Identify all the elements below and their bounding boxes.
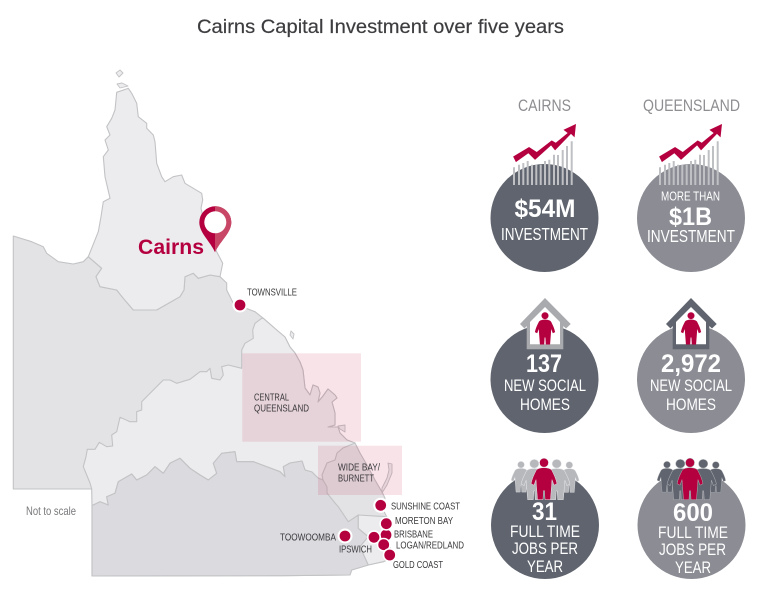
stat: Cairns social homes: HOMES: [520, 396, 570, 414]
label: Logan/Redland: LOGAN/REDLAND: [396, 541, 464, 552]
stat: Queensland jobs: 600: [673, 499, 713, 527]
column heading: Queensland: QUEENSLAND: [643, 96, 740, 115]
region: northwest and base of state: [13, 236, 393, 576]
stat: Queensland jobs: JOBS PER: [659, 541, 726, 559]
place marker: Gold Coast: [383, 548, 397, 562]
stat: Queensland jobs: YEAR: [675, 559, 711, 577]
label: Central Queensland: [254, 393, 309, 415]
highlight: Central Queensland: [242, 353, 361, 442]
stat: Cairns jobs: [491, 458, 599, 579]
stat: Queensland investment: INVESTMENT: [647, 226, 735, 246]
label: not to scale: Not to scale: [26, 504, 76, 518]
stat: Cairns jobs: 31: [532, 498, 557, 526]
stat: Cairns investment: [490, 123, 598, 272]
stat: Queensland jobs: [638, 458, 746, 579]
region: far north: [88, 88, 223, 310]
icon: house with person: [666, 298, 717, 349]
stat: Cairns social homes: NEW SOCIAL: [504, 377, 586, 395]
label: Townsville: TOWNSVILLE: [247, 288, 297, 299]
stat: Cairns social homes: 137: [526, 350, 562, 378]
label: Wide Bay Burnett: BURNETT: [338, 474, 375, 485]
map: Queensland regions: [13, 70, 393, 576]
label: Ipswich: IPSWICH: [339, 545, 372, 556]
label: Sunshine Coast: SUNSHINE COAST: [391, 502, 461, 513]
icon: rising bar chart: [512, 123, 577, 185]
stat: Queensland social homes: NEW SOCIAL: [650, 377, 732, 395]
place marker: Sunshine Coast: [373, 498, 388, 513]
place marker: Toowoomba: [338, 528, 352, 544]
label: Brisbane: BRISBANE: [394, 530, 433, 541]
place marker: Brisbane: [379, 528, 393, 542]
region: south west: [92, 452, 368, 576]
stat: Cairns social homes: [490, 298, 598, 433]
label: Gold Coast: GOLD COAST: [393, 560, 444, 571]
stat: Queensland social homes: [637, 298, 745, 433]
label: Toowoomba: TOOWOOMBA: [280, 533, 336, 544]
stat: Cairns jobs: YEAR: [527, 558, 563, 576]
icon: Cairns map pin: [199, 206, 231, 252]
icon: house with person: [520, 298, 571, 349]
stat: Cairns jobs: FULL TIME: [510, 523, 580, 541]
stat: Cairns investment: INVESTMENT: [501, 224, 588, 244]
icon: group of people: [657, 458, 726, 500]
icon: group of people: [511, 458, 579, 500]
stat: Queensland jobs: FULL TIME: [658, 524, 728, 542]
label: Central Queensland: QUEENSLAND: [254, 404, 309, 415]
icon: rising bar chart: [658, 123, 723, 185]
title: Cairns Capital Investment over five years: [197, 16, 564, 38]
highlight: Wide Bay Burnett: [318, 446, 402, 495]
islands: [116, 70, 392, 493]
stat: Cairns jobs: JOBS PER: [512, 540, 578, 558]
region: central band: [83, 318, 355, 505]
place marker: Ipswich: [367, 530, 381, 544]
place marker: Townsville: [232, 298, 248, 312]
stat: Cairns investment: $54M: [514, 195, 576, 223]
stat: Queensland social homes: HOMES: [666, 396, 716, 414]
label: Central Queensland: CENTRAL: [254, 393, 289, 404]
icon: rising arrow: [512, 123, 577, 163]
place marker: Moreton Bay: [379, 517, 393, 531]
column heading: Cairns: CAIRNS: [518, 96, 571, 115]
stat: Queensland social homes: 2,972: [661, 350, 721, 378]
label: Cairns: Cairns: [138, 236, 204, 259]
label: Wide Bay Burnett: [338, 463, 380, 485]
stat: Queensland investment: [637, 123, 745, 272]
region: south east corner: [358, 515, 393, 565]
icon: rising arrow: [658, 123, 723, 163]
place marker: Logan/Redland: [377, 538, 391, 552]
label: Wide Bay Burnett: WIDE BAY/: [338, 463, 380, 474]
stat: Queensland investment: $1B: [669, 203, 712, 231]
stat: Queensland investment: MORE THAN: [661, 189, 720, 204]
label: Moreton Bay: MORETON BAY: [395, 516, 453, 527]
